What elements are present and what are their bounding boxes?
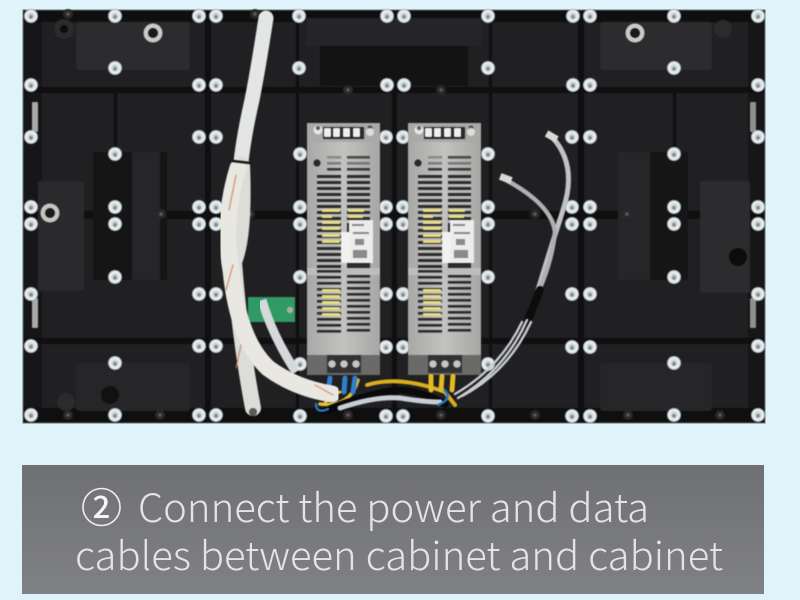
power supply: left xyxy=(307,123,380,375)
small nuts along ribs xyxy=(63,9,725,420)
step number badge xyxy=(83,482,120,527)
ribbon cable to board xyxy=(262,300,296,372)
power wiring between supplies xyxy=(316,376,455,412)
data cables right xyxy=(455,130,568,398)
power supply: right xyxy=(408,123,481,375)
cabinet frame ribs xyxy=(24,11,764,422)
photo: LED cabinet rear xyxy=(23,9,765,423)
green adapter board xyxy=(248,297,295,322)
wrapped cable harness xyxy=(226,18,333,416)
mounting bolts xyxy=(24,9,765,423)
caption banner xyxy=(22,465,764,594)
caption line 2: cables between cabinet and cabinet xyxy=(75,526,723,582)
mounting modules xyxy=(32,18,756,411)
caption line 1: Connect the power and data xyxy=(138,478,649,534)
step number badge: 2 xyxy=(93,482,110,527)
